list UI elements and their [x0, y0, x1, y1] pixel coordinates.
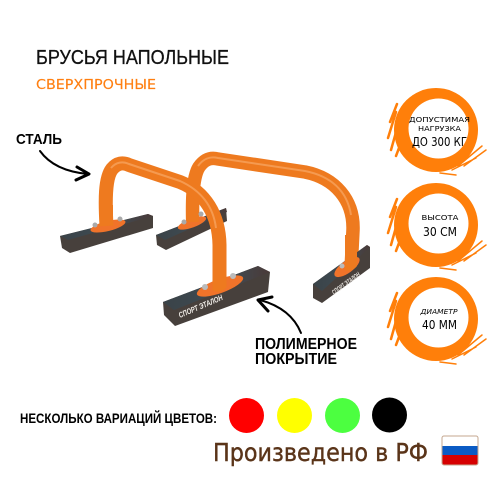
- brush ring: [388, 183, 486, 270]
- base print: СПОРТ ЭТАЛОН: [177, 293, 224, 320]
- base: back right: [156, 200, 227, 250]
- base: front: [163, 255, 270, 326]
- base: back left: [60, 205, 153, 253]
- product: parallel bars: [60, 157, 370, 326]
- badge: height: ВЫСОТА: [422, 214, 459, 222]
- base: right: [313, 235, 370, 303]
- badge: height: 30 СМ: [423, 225, 457, 239]
- label: coating: ПОКРЫТИЕ: [255, 351, 337, 368]
- front bar tube: [106, 162, 220, 262]
- colour variants label: НЕСКОЛЬКО ВАРИАЦИЙ ЦВЕТОВ:: [20, 409, 217, 426]
- base print: СПОРТ ЭТАЛОН: [331, 271, 362, 297]
- colour swatches: [229, 398, 407, 433]
- label: coating: [255, 336, 357, 368]
- brush ring: [388, 88, 486, 175]
- arrow: coating: [258, 297, 301, 333]
- back bar tube: [193, 157, 353, 270]
- made in Russia text: Произведено в РФ: [213, 438, 428, 467]
- badge: load: ДОПУСТИМАЯ: [409, 116, 470, 124]
- label: steel: СТАЛЬ: [16, 131, 62, 148]
- label: coating: ПОЛИМЕРНОЕ: [255, 336, 357, 353]
- badge: diameter: [388, 277, 486, 364]
- title: БРУСЬЯ НАПОЛЬНЫЕ: [36, 47, 229, 69]
- badge: diameter: ДИАМЕТР: [419, 308, 458, 316]
- badge: diameter: 40 ММ: [422, 318, 457, 332]
- badge: load: ДО 300 КГ: [412, 135, 467, 149]
- badge: height: [388, 183, 486, 270]
- arrow: steel: [40, 151, 89, 180]
- brush ring: [388, 277, 486, 364]
- icon: Russian flag: [442, 436, 478, 465]
- subtitle: СВЕРХПРОЧНЫЕ: [36, 77, 156, 93]
- badge: load: НАГРУЗКА: [418, 125, 461, 133]
- badge: load: [388, 88, 486, 175]
